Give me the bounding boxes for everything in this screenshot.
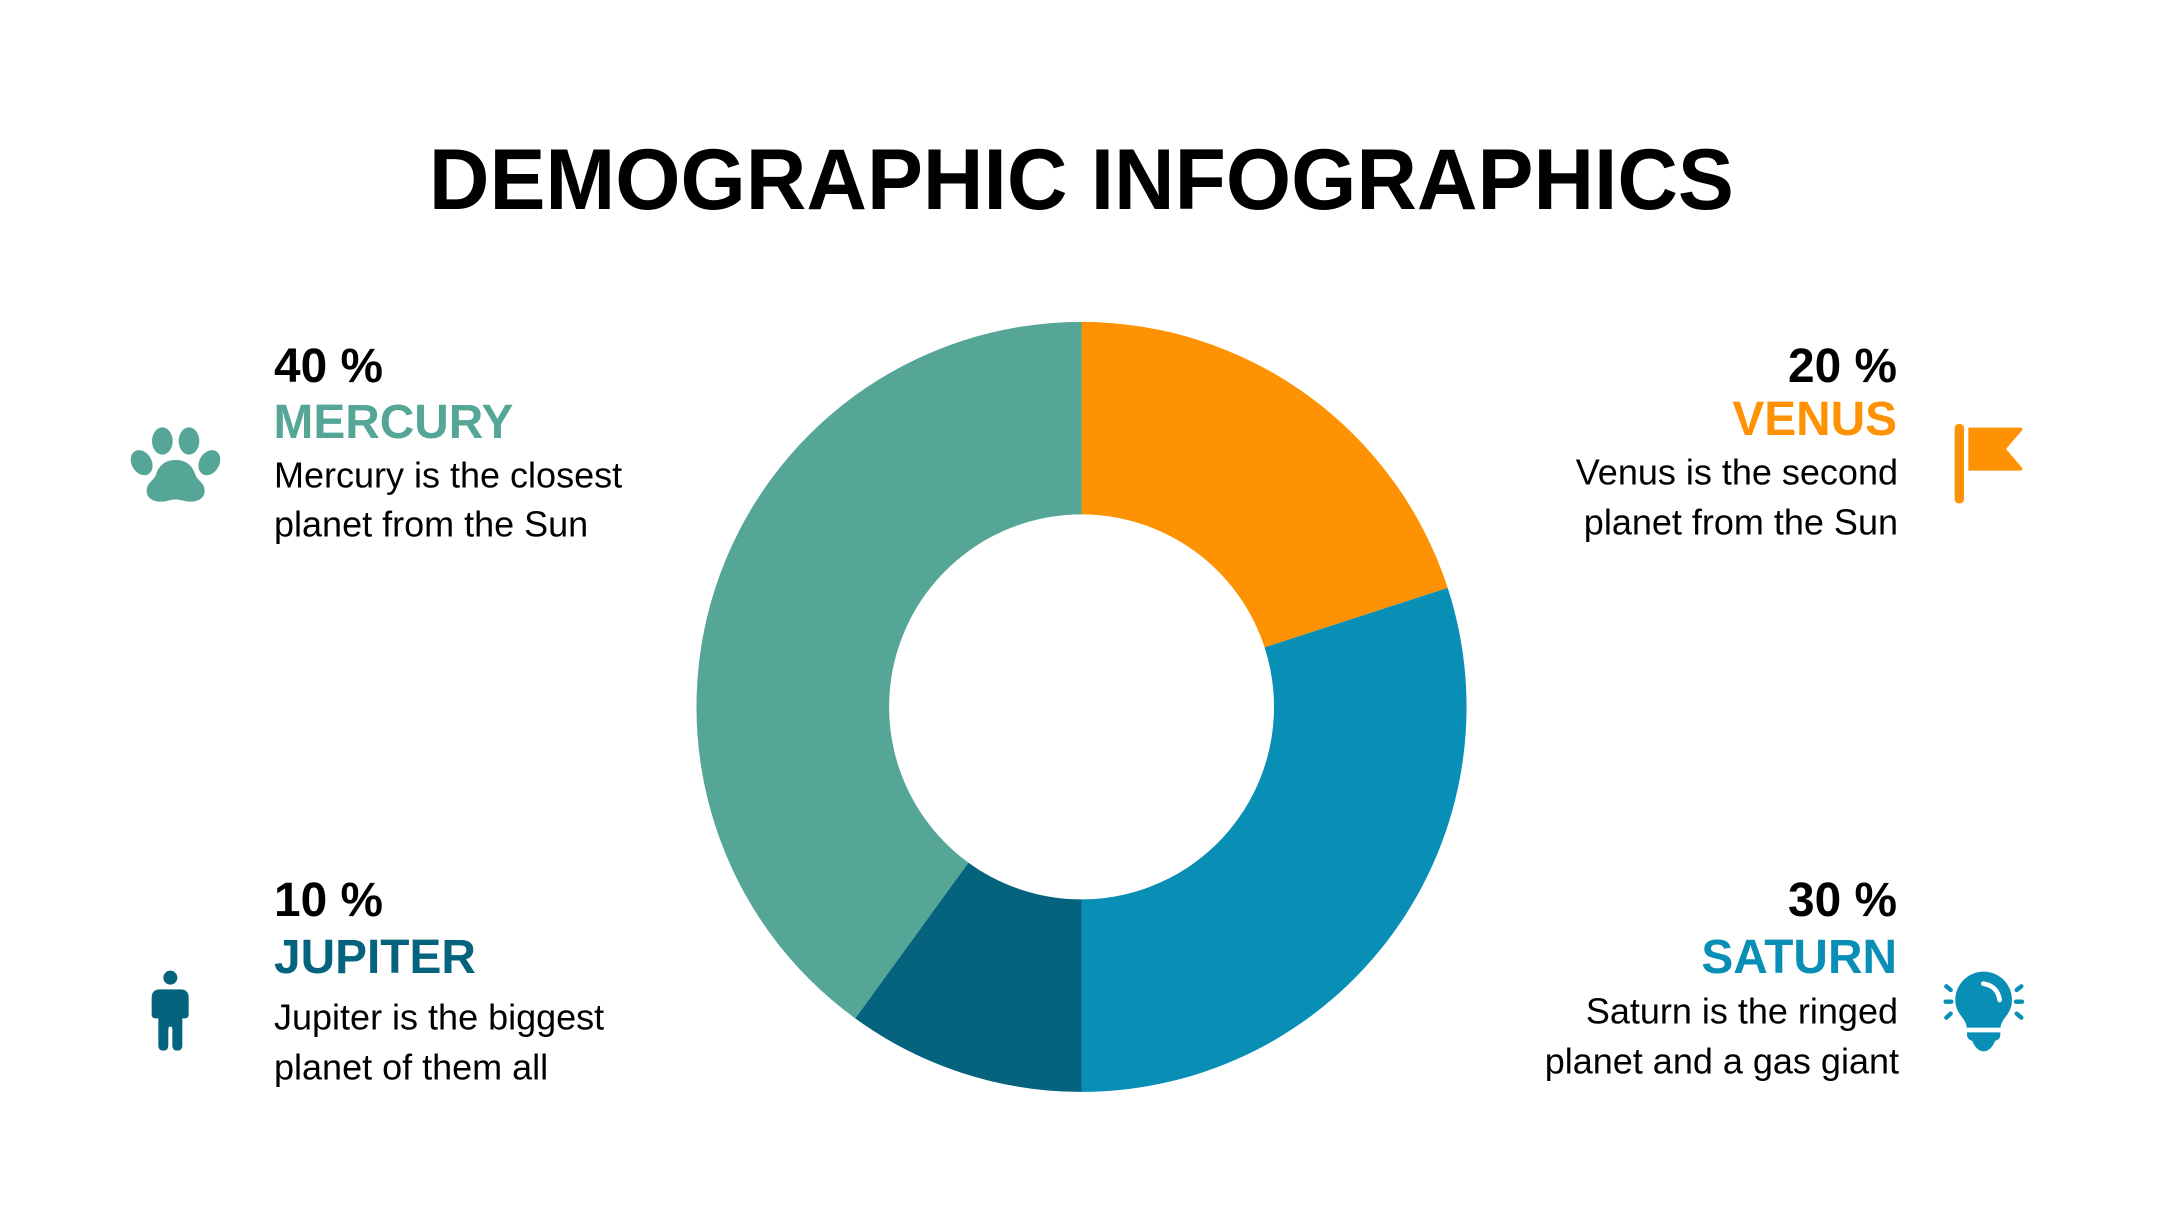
- panel: Venus: [1576, 340, 2022, 542]
- description: planet of them all: [274, 1046, 548, 1087]
- name: VENUS: [1732, 393, 1897, 446]
- description: Saturn is the ringed: [1586, 990, 1898, 1031]
- segment: Jupiter 10%: [855, 863, 1082, 1092]
- donut chart: [696, 322, 1467, 1092]
- percentage: 20 %: [1788, 340, 1897, 393]
- segment: Venus 20%: [1082, 322, 1448, 647]
- name: MERCURY: [274, 396, 513, 449]
- percentage: 40 %: [274, 340, 383, 393]
- description: Venus is the second: [1576, 451, 1898, 492]
- icon: person: [152, 971, 189, 1051]
- description: Jupiter is the biggest: [274, 996, 604, 1037]
- percentage: 30 %: [1788, 874, 1897, 927]
- panel: Jupiter: [152, 874, 604, 1087]
- icon: light bulb: [1946, 972, 2022, 1051]
- description: Mercury is the closest: [274, 454, 622, 495]
- description: planet from the Sun: [274, 503, 588, 544]
- segment: Mercury 40%: [696, 322, 1082, 1018]
- name: JUPITER: [274, 931, 476, 984]
- percentage: 10 %: [274, 874, 383, 927]
- panel: Mercury: [126, 340, 622, 544]
- name: SATURN: [1701, 931, 1897, 984]
- description: planet from the Sun: [1584, 501, 1898, 542]
- segment: Saturn 30%: [1082, 588, 1467, 1092]
- icon: paw: [126, 427, 225, 502]
- description: planet and a gas giant: [1545, 1040, 1899, 1081]
- title: DEMOGRAPHIC INFOGRAPHICS: [429, 132, 1734, 228]
- icon: flag: [1955, 424, 2022, 503]
- panel: Saturn: [1545, 874, 2022, 1081]
